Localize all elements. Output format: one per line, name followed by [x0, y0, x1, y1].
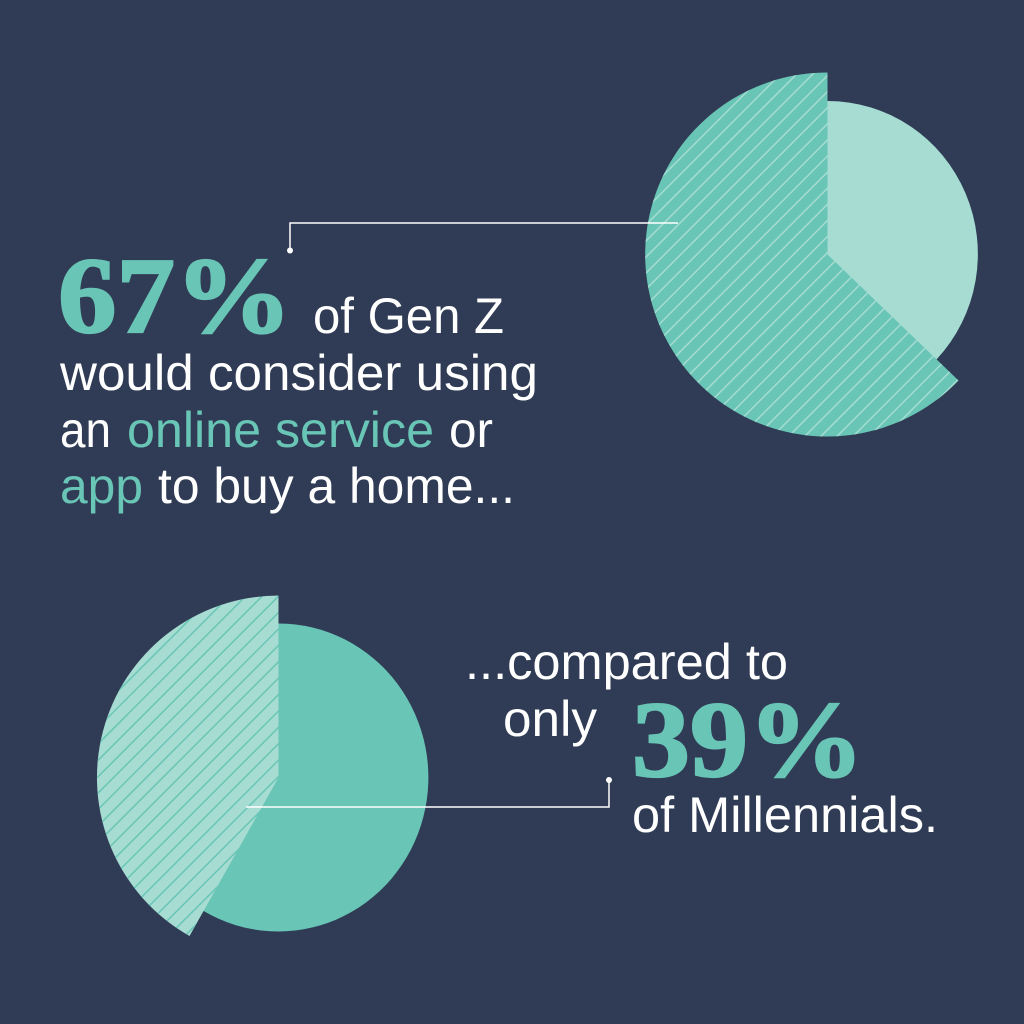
- big number: 67%: 67%: [58, 237, 292, 356]
- pie chart: Gen Z 67%: [640, 70, 978, 440]
- text line: app to buy a home...: to buy a home...: [158, 458, 515, 514]
- text block: Gen Z statistic: [58, 237, 538, 514]
- text line: only: only: [503, 691, 597, 747]
- connector line: Millennials: [246, 777, 612, 807]
- text line: app to buy a home...: app: [60, 458, 143, 514]
- text line: an online service or: or: [449, 402, 493, 458]
- connector line: Gen Z: [287, 223, 678, 254]
- infographic canvas: [60, 72, 978, 936]
- text line: of Gen Z: of Gen Z: [313, 288, 504, 344]
- text line: an online service or: online service: [127, 402, 434, 458]
- big number: 39%: 39%: [632, 681, 864, 800]
- text line: would consider using: would consider using: [59, 345, 538, 401]
- pie slice: remaining 33%: [820, 101, 978, 368]
- text line: an online service or: an: [60, 402, 111, 458]
- pie slice: Millennials 39% hatched: [90, 590, 280, 940]
- pie chart: Millennials 39%: [90, 590, 428, 940]
- pie slice: remaining 61%: [195, 624, 428, 931]
- text block: Millennials statistic: [465, 634, 938, 843]
- text line: of Millennials.: of Millennials.: [632, 787, 938, 843]
- pie slice: Gen Z 67% hatched: [640, 70, 965, 440]
- text line: ...compared to: ...compared to: [465, 634, 788, 690]
